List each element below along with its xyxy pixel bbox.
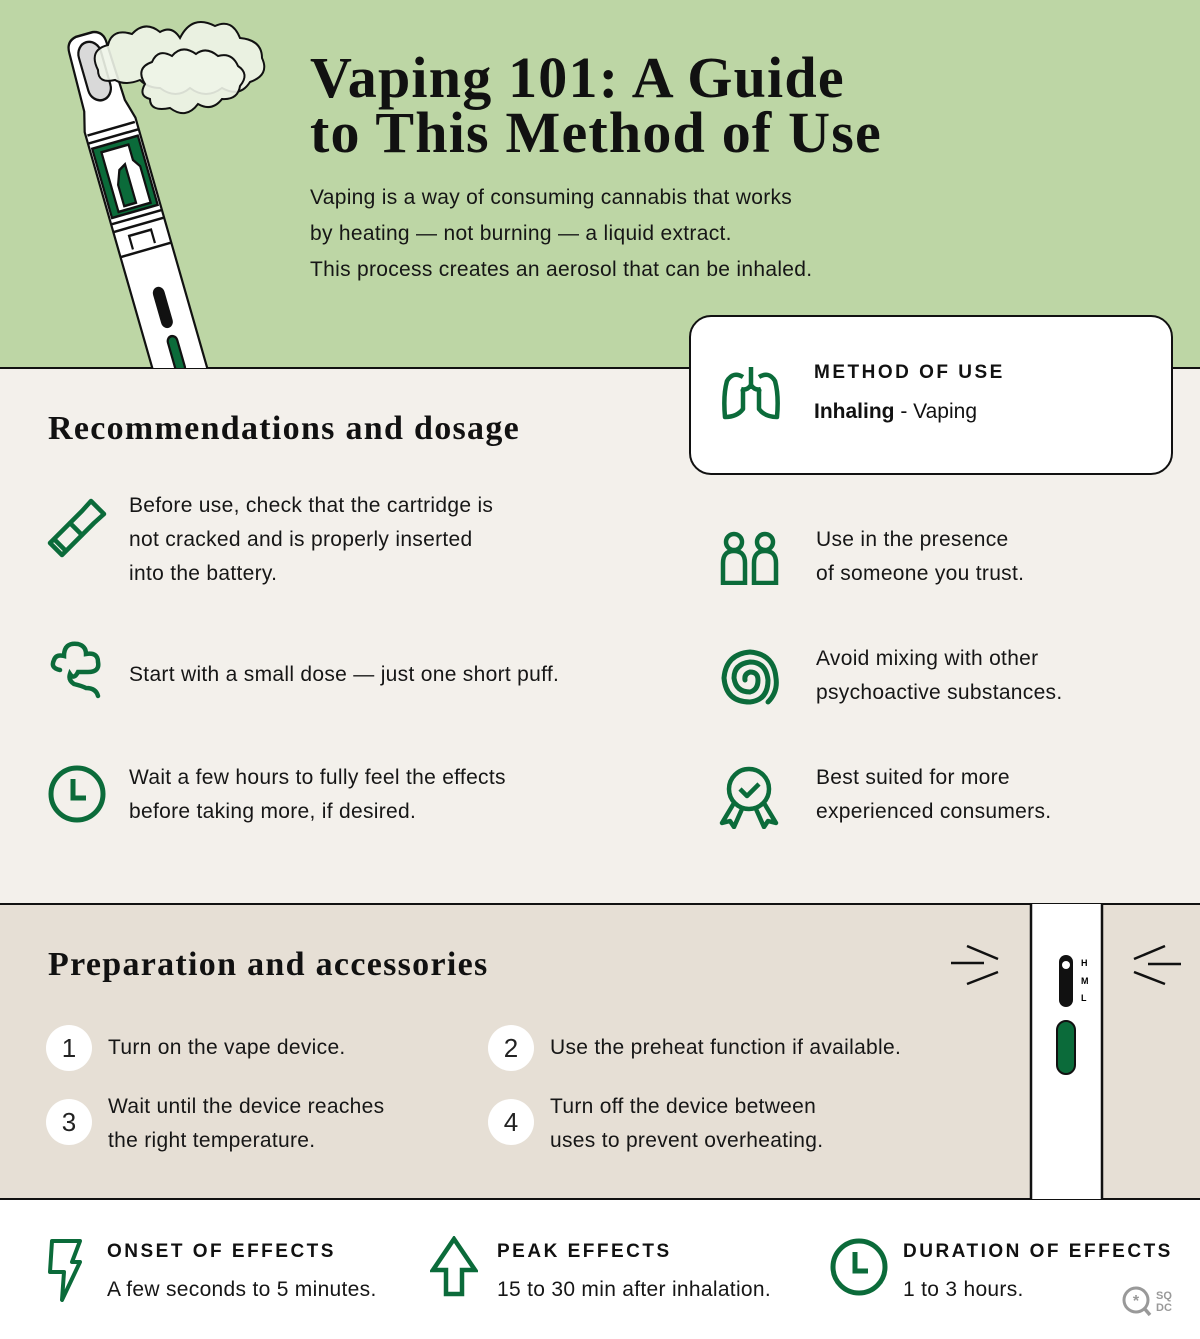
illustration: device close-up xyxy=(951,904,1181,1199)
recommendations background xyxy=(0,369,1200,904)
item: small dose xyxy=(50,642,559,698)
header background xyxy=(0,0,1200,369)
illustration: device close-up: M xyxy=(1081,976,1088,986)
clouds xyxy=(95,22,264,113)
stat: peak: PEAK EFFECTS xyxy=(497,1241,672,1262)
icon: award ribbon xyxy=(720,766,778,829)
step 3 xyxy=(46,1095,384,1152)
step 3: 3 xyxy=(62,1107,76,1137)
item: wait: before taking more, if desired. xyxy=(129,800,416,823)
item: avoid mixing xyxy=(722,647,1062,704)
item: trust xyxy=(720,528,1024,585)
step 4: uses to prevent overheating. xyxy=(550,1129,823,1152)
icon: lungs xyxy=(722,367,780,420)
logo: SQDC: * xyxy=(1133,1293,1140,1310)
intro text: by heating — not burning — a liquid extract. xyxy=(310,222,732,245)
item: experienced xyxy=(720,766,1051,829)
icon: puff xyxy=(50,642,101,698)
heading: preparation: Preparation and accessories xyxy=(48,946,489,983)
step 4: 4 xyxy=(504,1107,518,1137)
stat: duration xyxy=(830,1238,1173,1301)
item: trust: Use in the presence xyxy=(816,528,1008,551)
panel: method of use xyxy=(689,315,1173,475)
icon: two people xyxy=(720,532,778,585)
item: experienced: experienced consumers. xyxy=(816,800,1051,823)
item: wait xyxy=(48,766,506,823)
preparation background xyxy=(0,903,1200,1200)
illustration: vape pen with clouds xyxy=(67,21,266,368)
stat: onset: A few seconds to 5 minutes. xyxy=(107,1278,377,1301)
intro text: This process creates an aerosol that can be inhaled. xyxy=(310,258,812,281)
step 2 xyxy=(488,1025,901,1071)
icon: up arrow xyxy=(430,1236,478,1296)
item: wait: Wait a few hours to fully feel the effects xyxy=(129,766,506,789)
step 2: 2 xyxy=(504,1033,518,1063)
stat: onset xyxy=(48,1239,377,1302)
item: avoid mixing: Avoid mixing with other xyxy=(816,647,1038,670)
title xyxy=(310,45,882,165)
title: Vaping 101: A Guide xyxy=(310,45,845,110)
title: to This Method of Use xyxy=(310,100,882,165)
label: METHOD OF USE xyxy=(814,362,1005,383)
stat: onset: ONSET OF EFFECTS xyxy=(107,1241,336,1262)
step 1: Turn on the vape device. xyxy=(108,1036,346,1059)
icon: lightning xyxy=(48,1239,82,1302)
step 4: Turn off the device between xyxy=(550,1095,816,1118)
item: small dose: Start with a small dose — just one short puff. xyxy=(129,663,559,686)
icon: spiral xyxy=(722,650,779,704)
step 1: 1 xyxy=(62,1033,76,1063)
stat: peak: 15 to 30 min after inhalation. xyxy=(497,1278,771,1301)
item: trust: of someone you trust. xyxy=(816,562,1024,585)
logo: SQDC xyxy=(1122,1286,1172,1316)
step 3: Wait until the device reaches xyxy=(108,1095,384,1118)
item: experienced: Best suited for more xyxy=(816,766,1010,789)
illustration: device close-up: L xyxy=(1081,993,1087,1003)
intro text xyxy=(310,186,812,281)
icon: clock xyxy=(830,1238,888,1296)
stat: peak xyxy=(430,1236,771,1301)
panel: method of use: Inhaling - Vaping xyxy=(814,400,977,423)
stat: duration: DURATION OF EFFECTS xyxy=(903,1241,1173,1262)
icon: cartridge xyxy=(48,498,106,558)
logo: SQDC: DC xyxy=(1156,1302,1172,1314)
stat: duration: 1 to 3 hours. xyxy=(903,1278,1024,1301)
logo: SQDC: SQ xyxy=(1156,1290,1172,1302)
step 3: the right temperature. xyxy=(108,1129,315,1152)
step 2: Use the preheat function if available. xyxy=(550,1036,901,1059)
item: cartridge xyxy=(48,494,493,585)
heading: recommendations: Recommendations and dosage xyxy=(48,410,520,447)
step 1 xyxy=(46,1025,346,1071)
intro text: Vaping is a way of consuming cannabis that works xyxy=(310,186,792,209)
step 4 xyxy=(488,1095,823,1152)
illustration: device close-up: H xyxy=(1081,958,1088,968)
icon: clock xyxy=(48,766,106,822)
item: cartridge: into the battery. xyxy=(129,562,277,585)
item: cartridge: not cracked and is properly inserted xyxy=(129,528,472,551)
item: cartridge: Before use, check that the cartridge is xyxy=(129,494,493,517)
item: avoid mixing: psychoactive substances. xyxy=(816,681,1062,704)
